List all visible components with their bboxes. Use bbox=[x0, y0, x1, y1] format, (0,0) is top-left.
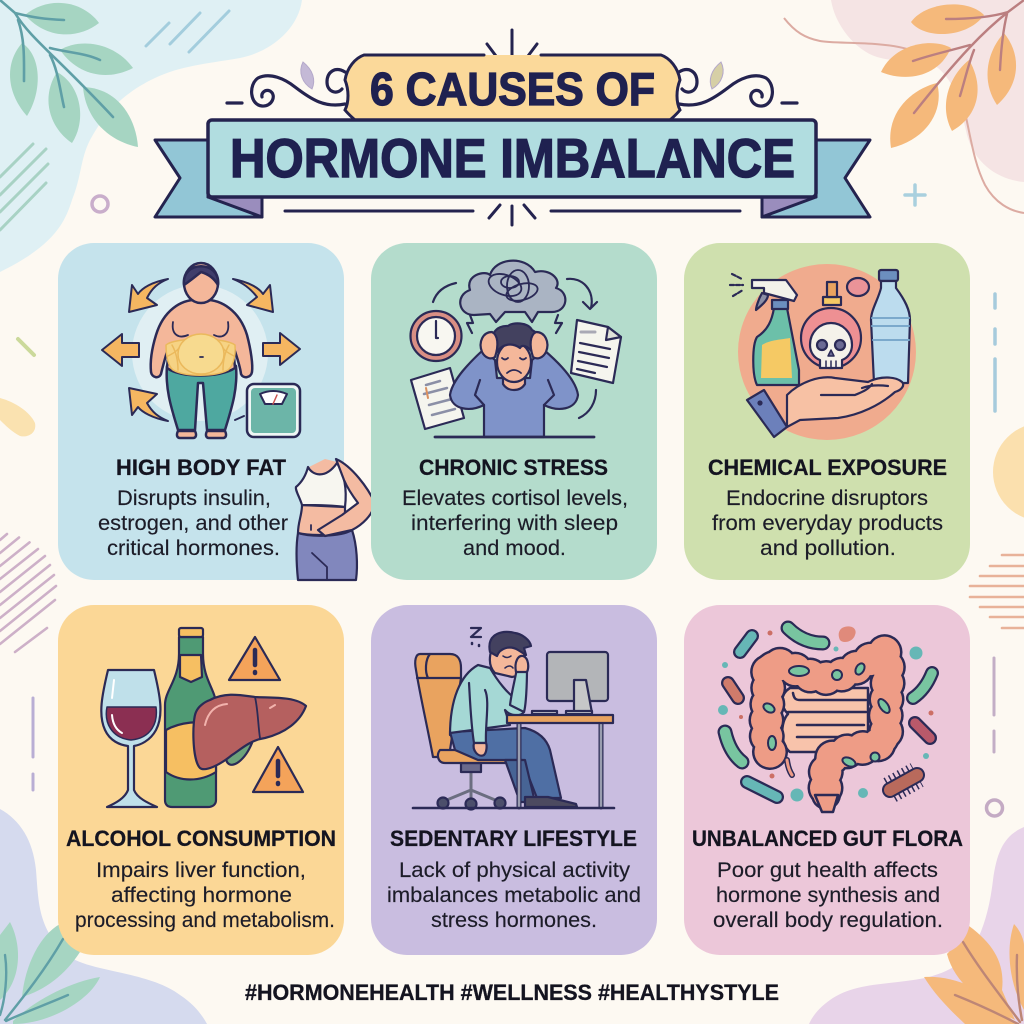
panel: high body fat bbox=[58, 243, 375, 580]
card background bbox=[58, 243, 344, 580]
description: interfering with sleep bbox=[411, 511, 618, 535]
card background bbox=[371, 605, 657, 955]
left hatched circle bbox=[0, 534, 56, 652]
description: hormone synthesis and bbox=[716, 883, 940, 907]
description: estrogen, and other bbox=[98, 511, 288, 535]
description bbox=[402, 486, 628, 560]
ribbon tail right bbox=[762, 140, 870, 217]
icon: wine, beer and liver bbox=[101, 628, 306, 807]
description bbox=[712, 486, 943, 560]
description: from everyday products bbox=[712, 511, 943, 535]
leaves bottom-left bbox=[0, 922, 100, 1024]
heading: CHRONIC STRESS bbox=[419, 455, 608, 480]
heading line one: 6 CAUSES OF bbox=[370, 63, 655, 115]
title banner bbox=[155, 30, 870, 225]
description: imbalances metabolic and bbox=[387, 883, 641, 907]
left yellow blob bbox=[0, 398, 35, 436]
icon: hand holding chemicals bbox=[730, 264, 916, 440]
heading: UNBALANCED GUT FLORA bbox=[692, 826, 963, 851]
description: processing and metabolism. bbox=[75, 908, 335, 932]
description bbox=[387, 858, 641, 932]
thin curved line bbox=[784, 18, 1024, 213]
flourish right bbox=[679, 70, 797, 106]
right blue dashes bbox=[993, 294, 997, 411]
icon: stressed man bbox=[410, 261, 621, 437]
icon: gut and bacteria bbox=[718, 626, 934, 812]
description bbox=[98, 486, 288, 560]
icon: woman holding waist bbox=[296, 459, 375, 580]
top-right blob bbox=[831, 0, 1024, 182]
inner microbes bbox=[762, 662, 892, 769]
right peach lines bbox=[970, 555, 1024, 628]
flourish left bbox=[227, 70, 345, 106]
description: Endocrine disruptors bbox=[726, 486, 928, 510]
outer bacteria bbox=[725, 628, 932, 797]
description: overall body regulation. bbox=[713, 908, 943, 932]
description: Elevates cortisol levels, bbox=[402, 486, 628, 510]
description bbox=[713, 858, 943, 932]
description: and pollution. bbox=[760, 536, 896, 560]
panel: unbalanced gut flora bbox=[684, 605, 970, 955]
description bbox=[75, 858, 335, 932]
description: Poor gut health affects bbox=[717, 858, 938, 882]
heading: ALCOHOL CONSUMPTION bbox=[66, 826, 336, 851]
card background bbox=[58, 605, 344, 955]
card background bbox=[371, 243, 657, 580]
heading: HIGH BODY FAT bbox=[116, 455, 287, 480]
heading line two: HORMONE IMBALANCE bbox=[230, 127, 795, 189]
icon: body with arrows and scale bbox=[102, 263, 300, 438]
colon bbox=[766, 652, 888, 795]
description: and mood. bbox=[463, 536, 566, 560]
plus bbox=[905, 185, 925, 205]
description: critical hormones. bbox=[107, 536, 280, 560]
top rays bbox=[487, 30, 537, 60]
banner face bbox=[208, 120, 816, 197]
small leaf left bbox=[301, 62, 314, 89]
blue stripes bbox=[146, 11, 229, 52]
ribbon folds bbox=[208, 197, 816, 217]
panel: sedentary lifestyle bbox=[371, 605, 657, 955]
card background bbox=[684, 605, 970, 955]
leaves top-right bbox=[881, 0, 1024, 148]
left green tick bbox=[18, 339, 34, 355]
description: affecting hormone bbox=[111, 883, 292, 907]
icon: tired man at desk bbox=[413, 628, 614, 810]
panel: chronic stress bbox=[371, 243, 657, 580]
panel: chemical exposure bbox=[684, 243, 970, 580]
description: Impairs liver function, bbox=[96, 858, 306, 882]
description: Disrupts insulin, bbox=[117, 486, 271, 510]
ring bottom-right bbox=[986, 800, 1002, 816]
green stripes bbox=[0, 144, 48, 230]
left lilac dashes bbox=[32, 698, 34, 790]
heading: SEDENTARY LIFESTYLE bbox=[390, 826, 637, 851]
ring top-left bbox=[92, 196, 108, 212]
right yellow circle bbox=[993, 423, 1024, 521]
heading: CHEMICAL EXPOSURE bbox=[708, 455, 947, 480]
description: stress hormones. bbox=[431, 908, 597, 932]
card background bbox=[684, 243, 970, 580]
ribbon tail left bbox=[155, 140, 262, 217]
lower rules bbox=[285, 205, 740, 225]
top-left blob bbox=[0, 0, 302, 272]
leaves bottom-right bbox=[924, 924, 1024, 1024]
hashtags: #HORMONEHEALTH #WELLNESS #HEALTHYSTYLE bbox=[245, 980, 779, 1005]
leaves top-left bbox=[0, 0, 138, 147]
right lilac dashes bbox=[992, 658, 996, 752]
small leaf right bbox=[710, 62, 723, 89]
orange plaque bbox=[345, 55, 680, 122]
small intestine bbox=[782, 688, 868, 752]
description: Lack of physical activity bbox=[399, 858, 630, 882]
bottom-right blob bbox=[809, 827, 1024, 1024]
panel: alcohol consumption bbox=[58, 605, 344, 955]
bottom-left blob bbox=[0, 809, 207, 1024]
